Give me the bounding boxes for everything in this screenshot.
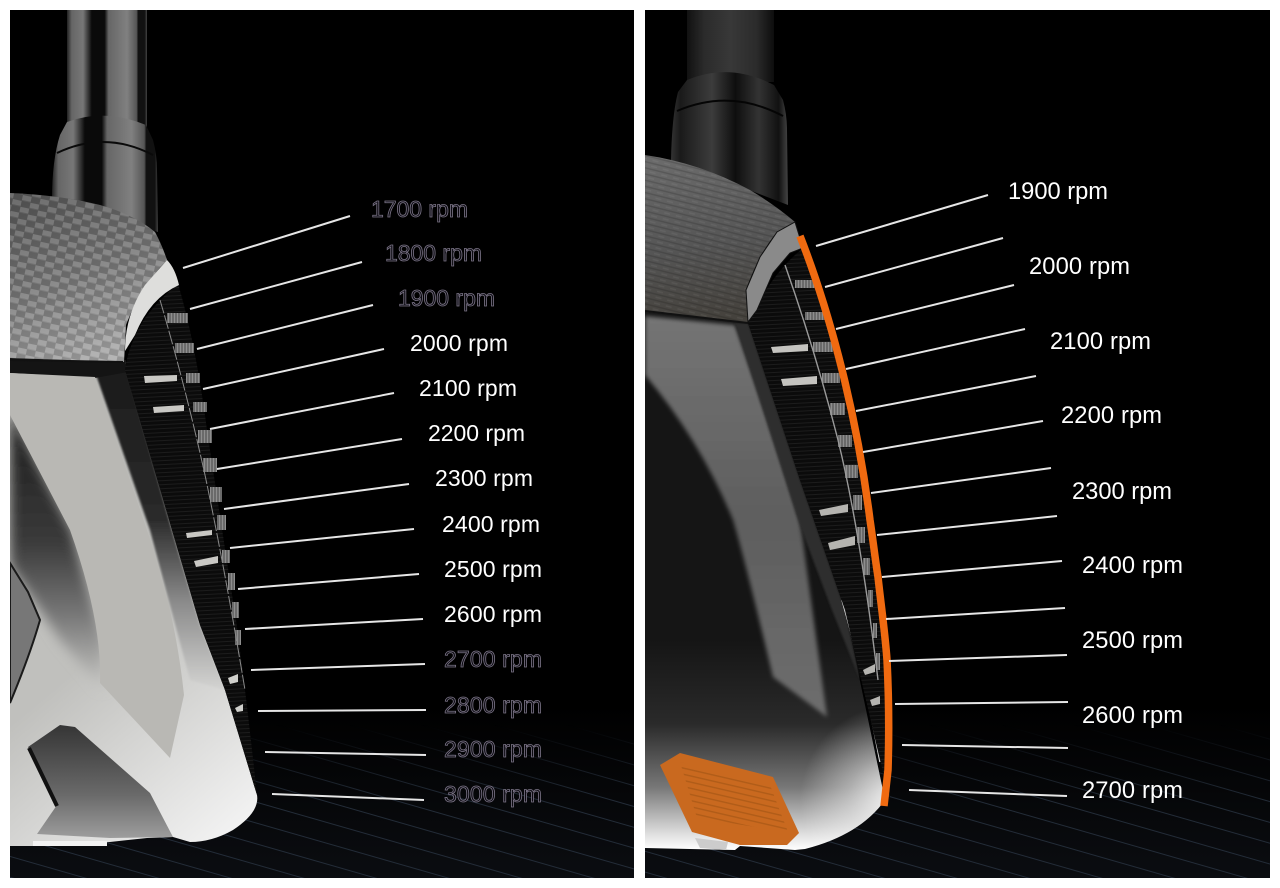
rpm labels, right panel: 2300 rpm [1072, 479, 1172, 505]
club shaft [687, 10, 774, 82]
rpm labels, left panel: 2100 rpm [419, 375, 517, 401]
rpm labels, right panel: 1900 rpm [1008, 179, 1108, 205]
rpm labels, right panel: 2000 rpm [1029, 254, 1130, 280]
sole pocket [28, 725, 173, 838]
leader lines to rpm labels [183, 216, 426, 800]
white sole strip [33, 841, 107, 846]
orange sole pad [660, 753, 799, 850]
rpm labels, left panel: 1900 rpm [398, 285, 495, 311]
rpm labels, left panel: 2900 rpm [444, 736, 542, 762]
upper sole band [645, 316, 827, 717]
dark strip beside the face [735, 323, 860, 680]
rpm labels, left panel: 1800 rpm [385, 240, 482, 266]
rpm labels, right panel: 2400 rpm [1082, 553, 1183, 579]
rpm labels, left panel: 2500 rpm [444, 556, 542, 582]
rpm labels, left panel: 2400 rpm [442, 511, 540, 537]
leader lines to rpm labels [816, 195, 1068, 796]
carbon panel [10, 563, 40, 703]
panel: right club, new spin range [645, 10, 1270, 888]
rpm labels, right panel: 2100 rpm [1050, 329, 1151, 355]
crown with woven carbon [10, 193, 167, 362]
rpm labels, right panel: 2500 rpm [1082, 628, 1183, 654]
top dark band under crown [10, 358, 128, 378]
rpm labels, left panel: 2300 rpm [435, 465, 533, 491]
rpm labels, left panel: 2000 rpm [410, 330, 508, 356]
club sole [645, 312, 882, 850]
rpm labels, left panel: 2200 rpm [428, 420, 525, 446]
white crown edge strip [125, 260, 179, 351]
rpm labels, left panel: 3000 rpm [444, 781, 542, 807]
rpm labels, right panel: 2600 rpm [1082, 703, 1183, 729]
dark sole shading [10, 410, 103, 690]
rpm labels, right panel: 2200 rpm [1061, 403, 1162, 429]
club face grooves [125, 284, 257, 795]
pocket shadow edge [29, 748, 57, 806]
club face grooves [748, 248, 890, 800]
light sole panel [10, 373, 184, 758]
rpm labels, right panel [1008, 179, 1183, 804]
panel: left club, current spin range [10, 10, 634, 878]
rpm labels, right panel: 2700 rpm [1082, 778, 1183, 804]
rpm labels, left panel: 1700 rpm [371, 196, 468, 222]
dark strip beside the face [95, 362, 225, 690]
club ferrule [671, 72, 788, 205]
rpm labels, left panel: 2600 rpm [444, 601, 542, 627]
rpm labels, left panel [371, 196, 542, 807]
rpm labels, left panel: 2800 rpm [444, 692, 542, 718]
thin white face edge [842, 600, 880, 762]
club sole [10, 358, 257, 846]
club shaft [67, 10, 147, 128]
grey crown edge strip [746, 222, 803, 322]
rpm labels, left panel: 2700 rpm [444, 646, 542, 672]
club ferrule [52, 116, 158, 232]
crown with fine carbon [645, 155, 795, 323]
orange face curve [800, 236, 889, 806]
